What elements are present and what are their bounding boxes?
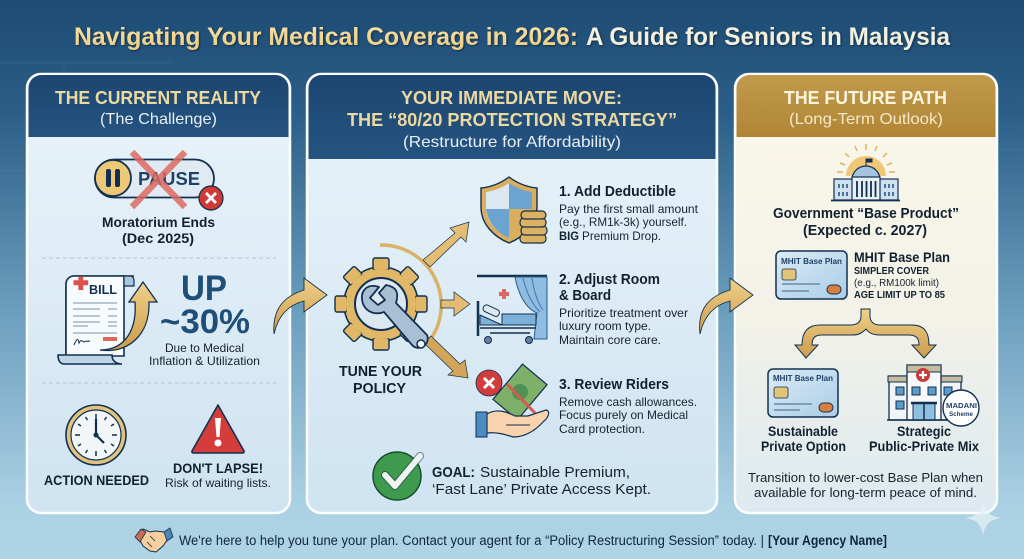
- title: Navigating Your Medical Coverage in 2026:: [74, 23, 578, 51]
- panel header: THE FUTURE PATH: [784, 88, 947, 108]
- text: moratorium ends: Moratorium Ends: [102, 214, 215, 230]
- item 3 text: 3. Review Riders: [559, 377, 669, 393]
- item 1 text: (e.g., RM1k-3k) yourself.: [559, 215, 687, 229]
- text: do not lapse: DON'T LAPSE!: [173, 460, 263, 476]
- icon: hospital with MADANI badge: Scheme: [949, 411, 973, 418]
- text: moratorium ends: [102, 214, 215, 246]
- panel header: [308, 75, 716, 159]
- item 2 text: luxury room type.: [559, 319, 651, 333]
- text: MHIT base plan details: SIMPLER COVER: [854, 265, 929, 277]
- text: MHIT base plan details: (e.g., RM100k limit): [854, 277, 939, 289]
- arrow: brace splitting into two options: [795, 309, 936, 358]
- text: sustainable private option: Sustainable: [768, 423, 838, 439]
- text: transition note: [748, 470, 983, 500]
- text: transition note: Transition to lower-cost Base Plan when: [748, 470, 983, 485]
- text: government base product: [773, 206, 959, 239]
- icon: cash in hand crossed out: [476, 364, 549, 437]
- panel header: YOUR IMMEDIATE MOVE:: [401, 88, 622, 108]
- text: government base product: (Expected c. 2027): [803, 223, 927, 239]
- label: tune your policy: POLICY: [353, 381, 406, 397]
- text: strategic public-private mix: Strategic: [897, 423, 951, 439]
- icon: warning triangle: [192, 405, 244, 453]
- panel header: (Restructure for Affordability): [403, 134, 621, 151]
- item 3 text: Remove cash allowances.: [559, 395, 697, 409]
- item 2 text: Prioritize treatment over: [559, 306, 688, 320]
- icon: sparkle: [965, 501, 1001, 536]
- item 3 text: Focus purely on Medical: [559, 408, 688, 422]
- stat: up to 30 percent: Due to Medical: [165, 341, 244, 355]
- text: action needed: ACTION NEEDED: [44, 472, 149, 488]
- item 1 text: Pay the first small amount: [559, 202, 699, 216]
- text: MHIT base plan details: AGE LIMIT UP TO 85: [854, 289, 945, 301]
- text: do not lapse: Risk of waiting lists.: [165, 476, 271, 490]
- text: sustainable private option: Private Option: [761, 438, 846, 454]
- item 1 text: Premium Drop.: [582, 229, 661, 243]
- text: do not lapse: [165, 460, 271, 490]
- panel header: THE CURRENT REALITY: [55, 88, 261, 108]
- panel header: [736, 75, 996, 137]
- panel: the future path: [735, 74, 997, 513]
- text: MHIT base plan details: MHIT Base Plan: [854, 249, 950, 265]
- item 2 text: Maintain core care.: [559, 333, 661, 347]
- stat: up to 30 percent: Inflation & Utilization: [149, 354, 260, 368]
- icon: hospital with MADANI badge: [887, 365, 979, 426]
- icon: MHIT card: [776, 251, 847, 299]
- goal text: GOAL:: [432, 464, 475, 481]
- item 1 text: BIG: [559, 229, 579, 243]
- arrow: reality to immediate move: [274, 278, 327, 334]
- icon: MHIT card: MHIT Base Plan: [781, 257, 842, 266]
- icon: pause switch crossed out: [95, 152, 223, 210]
- icon: private option card: [768, 369, 838, 417]
- goal text: ‘Fast Lane’ Private Access Kept.: [432, 481, 651, 498]
- icon: handshake: [135, 528, 173, 552]
- text: strategic public-private mix: [869, 423, 979, 454]
- icon: clock: [66, 405, 126, 465]
- text: transition note: available for long-term peace of mind.: [754, 485, 977, 500]
- footer call to action: We're here to help you tune your plan. Contact your agent for a “Policy Restructuring Session” today. |: [179, 533, 764, 548]
- text: MHIT base plan details: [854, 249, 950, 301]
- label: tune your policy: [339, 364, 423, 397]
- icon: hospital with MADANI badge: MADANI: [946, 401, 977, 410]
- text: strategic public-private mix: Public-Private Mix: [869, 438, 979, 454]
- panel header: THE “80/20 PROTECTION STRATEGY”: [347, 110, 677, 130]
- text: government base product: Government “Base Product”: [773, 206, 959, 222]
- item 1 text: [559, 184, 699, 243]
- text: sustainable private option: [761, 423, 846, 454]
- panel: the current reality: [27, 74, 290, 513]
- stat: up to 30 percent: [149, 269, 260, 368]
- item 3 text: [559, 377, 697, 436]
- stat: up to 30 percent: ~30%: [160, 303, 250, 341]
- item 2 text: [559, 272, 688, 347]
- title: [74, 23, 951, 51]
- icon: medical bill with rising arrow: BILL: [89, 283, 117, 297]
- panel: immediate move: [307, 74, 717, 513]
- item 2 text: 2. Adjust Room: [559, 272, 660, 288]
- item 3 text: Card protection.: [559, 422, 645, 436]
- arrows: gear branching to three actions: [380, 222, 470, 378]
- icon: medical bill with rising arrow: [58, 276, 157, 364]
- icon: private option card: MHIT Base Plan: [773, 374, 833, 383]
- item 1 text: 1. Add Deductible: [559, 184, 676, 200]
- footer call to action: [Your Agency Name]: [768, 533, 887, 548]
- stat: up to 30 percent: UP: [181, 269, 227, 308]
- panel header: (Long-Term Outlook): [789, 111, 943, 128]
- icon: shield and coins: [481, 177, 547, 243]
- icon: gear and wrench: [335, 258, 428, 350]
- item 2 text: & Board: [559, 288, 611, 304]
- label: tune your policy: TUNE YOUR: [339, 364, 423, 380]
- icon: pause switch crossed out: PAUSE: [138, 169, 200, 189]
- panel header: [28, 75, 288, 137]
- goal text: [432, 464, 651, 498]
- text: moratorium ends: (Dec 2025): [122, 230, 194, 246]
- goal text: Sustainable Premium,: [480, 464, 630, 481]
- icon: government building with sun: [831, 144, 900, 200]
- title: A Guide for Seniors in Malaysia: [586, 23, 951, 51]
- panel header: (The Challenge): [100, 111, 217, 128]
- icon: hospital bed and curtain: [477, 276, 547, 344]
- icon: green check: [373, 452, 421, 500]
- arrow: immediate move to future path: [700, 278, 753, 334]
